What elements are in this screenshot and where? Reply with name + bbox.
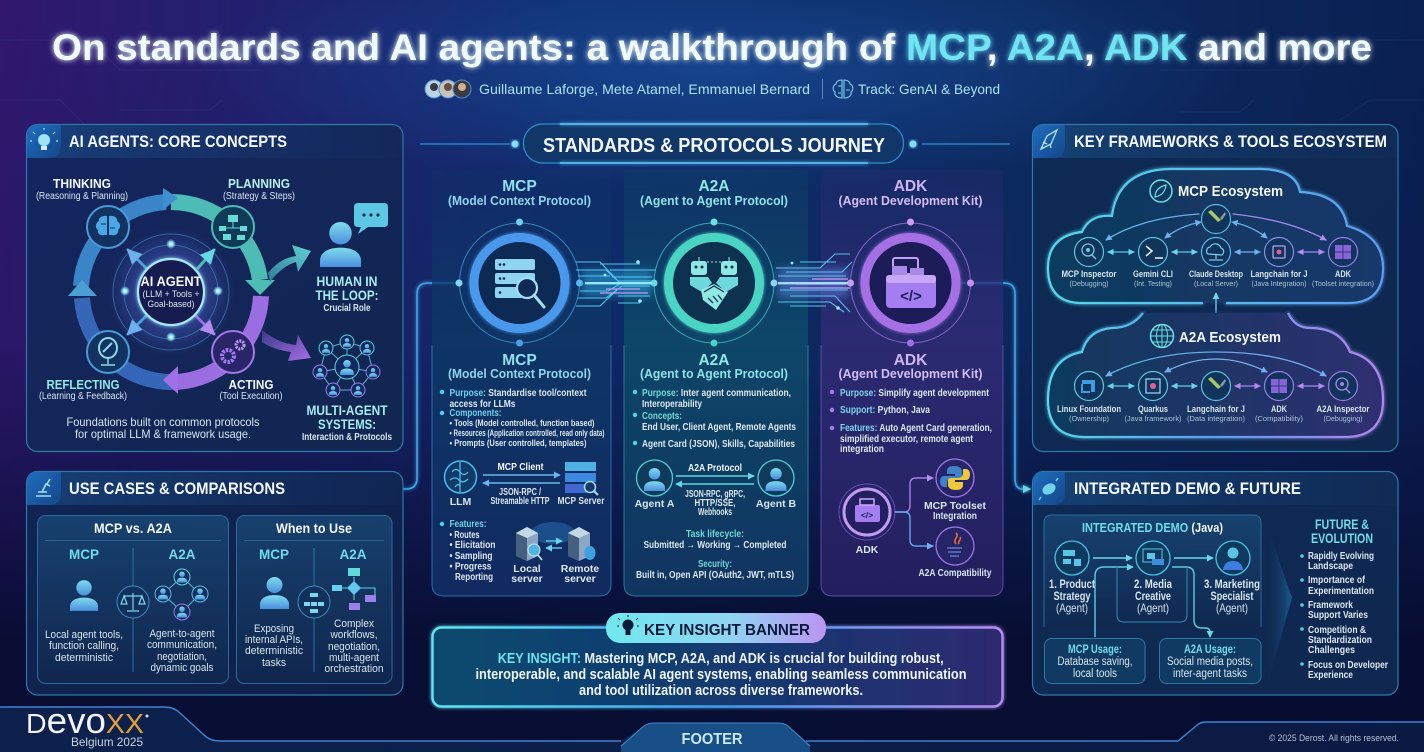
A2A details: End User, Client Agent, Remote Agents [642, 421, 796, 433]
MCP client-server diagram: MCP Client [498, 461, 544, 473]
future and evolution list: Importance of [1308, 574, 1365, 586]
labels: MCP ecosystem: (Debugging) [1070, 279, 1109, 288]
heading: INTEGRATED DEMO & FUTURE [1074, 479, 1301, 498]
future and evolution list: Challenges [1308, 644, 1355, 656]
column: MCP: MCP [502, 178, 537, 195]
comparison: MCP vs A2A: communication, [147, 639, 217, 651]
task lifecycle and security: Task lifecycle: [686, 528, 744, 540]
comparison: MCP vs A2A: Local agent tools, [45, 629, 123, 641]
cycle ring arrows [68, 188, 275, 394]
labels: A2A ecosystem: (Data integration) [1187, 414, 1245, 423]
foundations note [66, 415, 260, 441]
icon: workflow [332, 568, 376, 610]
A2A protocol diagram: JSON-RPC, gRPC, [685, 488, 745, 500]
labels: agents: 1. Product [1049, 577, 1095, 591]
comparison: MCP vs A2A: MCP [69, 547, 99, 562]
integrated demo flow [1044, 515, 1261, 684]
column: ADK: ADK [894, 178, 928, 195]
labels: agents: 2. Media [1134, 577, 1172, 591]
MCP client-server diagram [444, 461, 604, 508]
ADK integrations diagram: MCP Toolset [924, 500, 986, 512]
stage labels: THINKING [53, 177, 111, 191]
icon: brain [833, 80, 853, 98]
column: ADK [821, 170, 1003, 596]
local and remote servers [511, 522, 599, 585]
task lifecycle and security [636, 528, 794, 581]
AI agent core [138, 259, 204, 325]
comparison: MCP vs A2A: negotiation, [157, 651, 207, 663]
MCP client-server diagram: LLM [450, 496, 472, 508]
MCP details: • Resources (Application controlled, read only data) [450, 428, 604, 438]
heading: USE CASES & COMPARISONS [69, 479, 285, 498]
comparison: MCP vs A2A: function calling, [49, 640, 119, 652]
comparison: when to use [236, 516, 392, 684]
key insight label pill [606, 613, 826, 643]
connector lines from journey to side panels [403, 283, 1030, 489]
icon: planning flow [212, 206, 254, 248]
future and evolution list: Rapidly Evolving [1308, 550, 1374, 562]
icon: integration [1033, 472, 1065, 505]
multi-agent systems: MULTI-AGENT [306, 403, 388, 418]
arrow to multi-agent systems [262, 330, 311, 361]
icon: LLM brain [444, 461, 476, 493]
insight text: interoperable, and scalable AI agent systems, enabling seamless communication [476, 666, 966, 683]
arrow between ecosystems [1215, 293, 1217, 323]
MCP details: access for LLMs [450, 398, 516, 410]
labels: agents: (Agent) [1056, 601, 1088, 615]
future and evolution list: Competition & [1308, 624, 1366, 636]
MCP ecosystem cloud: MCP Ecosystem [1178, 183, 1283, 200]
icon: toolbox with code: </> [900, 288, 922, 305]
ADK details: Features: Auto Agent Card generation, [840, 422, 992, 434]
stage labels: (Tool Execution) [220, 391, 282, 402]
future and evolution list: Support Varies [1308, 609, 1368, 621]
labels: A2A ecosystem: Quarkus [1138, 404, 1168, 415]
A2A protocol diagram: Agent A [635, 498, 675, 510]
labels: A2A ecosystem: (Ownership) [1069, 414, 1109, 423]
MCP client-server diagram: MCP Server [558, 495, 604, 507]
MCP features list: • Progress [450, 561, 492, 573]
labels: A2A ecosystem: A2A Inspector [1316, 404, 1370, 415]
labels: agents: Specialist [1210, 589, 1254, 603]
multi-agent systems: Interaction & Protocols [302, 432, 392, 443]
labels: agents: (Agent) [1216, 601, 1248, 615]
future and evolution list: Focus on Developer [1308, 659, 1388, 671]
labels: A2A ecosystem: Linux Foundation [1057, 404, 1121, 415]
A2A protocol diagram [635, 460, 797, 518]
A2A details: Concepts: [642, 410, 682, 422]
comparison: MCP vs A2A: Agent-to-agent [150, 628, 214, 640]
labels: MCP ecosystem: Gemini CLI [1133, 269, 1173, 280]
MCP usage box: Database saving, [1058, 656, 1132, 668]
speakers and track line [425, 79, 1000, 99]
Devoxx logo: Belgium 2025 [71, 735, 143, 749]
ADK details: Purpose: Simplify agent development [840, 387, 989, 399]
local and remote servers: Local [513, 563, 541, 575]
stage labels [36, 177, 295, 402]
icon: acting gears [212, 331, 254, 373]
stage labels: (Reasoning & Planning) [36, 191, 128, 202]
labels: A2A ecosystem: ADK [1271, 404, 1287, 415]
insight text [476, 650, 966, 699]
icon: agent network [155, 569, 208, 620]
panel: use cases and comparisons [26, 472, 403, 695]
A2A details: Agent Card (JSON), Skills, Capabilities [642, 438, 795, 450]
ADK integrations diagram: </> [861, 510, 873, 520]
human in the loop: THE LOOP: [316, 288, 378, 303]
comparison: when to use: MCP [259, 547, 289, 562]
A2A ecosystem cloud: A2A Ecosystem [1179, 329, 1281, 346]
column: ADK: (Agent Development Kit) [838, 194, 982, 208]
ADK details [830, 387, 992, 455]
labels: agents: (Agent) [1137, 601, 1169, 615]
comparison: MCP vs A2A: MCP vs. A2A [94, 520, 172, 536]
MCP details: Components: [450, 407, 502, 419]
icons: agents [1055, 541, 1250, 575]
comparison: when to use: internal APIs, [245, 634, 303, 646]
column: MCP: (Model Context Protocol) [448, 367, 591, 381]
MCP usage box: MCP Usage: [1068, 642, 1122, 656]
stage labels: PLANNING [228, 177, 290, 191]
comparison: MCP vs A2A: deterministic [55, 652, 113, 664]
icon: python [940, 466, 970, 490]
foundations note: Foundations built on common protocols [66, 415, 260, 429]
data streams between protocols [576, 254, 852, 312]
heading: AI AGENTS: CORE CONCEPTS [69, 132, 287, 151]
icon: hierarchy [298, 586, 330, 618]
A2A protocol diagram: A2A Protocol [688, 462, 742, 474]
A2A details [633, 387, 796, 450]
MCP client-server diagram: JSON-RPC / [499, 486, 541, 498]
stage labels: ACTING [228, 378, 274, 392]
MCP details [440, 387, 604, 526]
comparison: when to use: Exposing [254, 623, 294, 635]
MCP usage box: local tools [1073, 668, 1117, 680]
icon: robots handshake [650, 218, 778, 346]
labels: agents [1049, 577, 1260, 615]
icons: tools in MCP ecosystem [1082, 210, 1351, 260]
icon: server with magnifier [456, 218, 583, 346]
labels: MCP ecosystem: Claude Desktop [1189, 269, 1243, 280]
ADK integrations diagram: A2A Compatibility [918, 567, 992, 579]
human in the loop: HUMAN IN [316, 274, 378, 289]
comparison: MCP vs A2A: dynamic goals [150, 662, 214, 674]
icon: bulb [617, 615, 639, 635]
labels: A2A ecosystem: (Compatibility) [1255, 414, 1303, 423]
comparison: MCP vs A2A [38, 516, 228, 684]
icon: MCP server [565, 462, 598, 495]
stage labels: (Learning & Feedback) [39, 391, 127, 402]
footer label: FOOTER [682, 731, 743, 748]
speaker avatars [425, 80, 471, 98]
comparison: when to use: multi-agent [329, 652, 379, 664]
MCP details: • Prompts (User controlled, templates) [450, 438, 586, 449]
A2A protocol diagram: HTTP/SSE, [694, 497, 736, 509]
future and evolution list: FUTURE & [1315, 517, 1369, 532]
ADK details: simplified executor, remote agent [840, 433, 973, 445]
panel: AI agents core concepts [26, 124, 403, 452]
MCP features list: • Routes [450, 529, 480, 541]
ADK integrations diagram: ADK [856, 544, 879, 556]
A2A usage box: A2A Usage: [1184, 642, 1236, 656]
A2A protocol diagram: Webhooks [698, 506, 732, 518]
A2A details: Interoperability [642, 398, 702, 410]
icons: tools in A2A ecosystem [1082, 377, 1350, 393]
track: Track: GenAI & Beyond [858, 81, 1000, 97]
MCP details: Purpose: Standardise tool/context [450, 387, 587, 399]
AI agent core: (LLM + Tools + [142, 289, 200, 300]
A2A ecosystem cloud [1048, 313, 1383, 437]
icon: reflecting mirror [87, 331, 129, 373]
copyright: © 2025 Derost. All rights reserved. [1269, 733, 1399, 743]
labels: agents: Creative [1135, 589, 1171, 603]
agent cycle [36, 177, 295, 402]
icon: scales [117, 586, 149, 618]
A2A details: Purpose: Inter agent communication, [642, 387, 791, 399]
MCP features list: Features: [450, 518, 486, 530]
comparison: when to use: deterministic [245, 645, 303, 657]
task lifecycle and security: Built in, Open API (OAuth2, JWT, mTLS) [636, 569, 794, 581]
AI agent core: Goal-based) [148, 299, 194, 310]
journey heading pill: STANDARDS & PROTOCOLS JOURNEY [543, 135, 886, 157]
panel: integrated demo and future [1032, 472, 1398, 695]
icon: java [947, 533, 962, 556]
future and evolution list: EVOLUTION [1311, 531, 1373, 546]
labels: A2A ecosystem: (Debugging) [1324, 414, 1363, 423]
future and evolution list: Framework [1308, 599, 1353, 611]
labels: MCP ecosystem: (Toolset integration) [1312, 279, 1374, 288]
human in the loop [316, 203, 388, 314]
icon: rocket [1033, 125, 1065, 158]
future and evolution list: Experience [1308, 669, 1353, 681]
A2A usage box: Social media posts, [1167, 656, 1253, 668]
future and evolution list: Landscape [1308, 560, 1353, 572]
local and remote servers: server [511, 573, 543, 585]
column: MCP: (Model Context Protocol) [448, 194, 591, 208]
heading: KEY FRAMEWORKS & TOOLS ECOSYSTEM [1074, 132, 1387, 151]
comparison: when to use: When to Use [276, 520, 352, 536]
comparison: when to use: Complex [334, 618, 374, 630]
comparison: when to use: tasks [262, 657, 286, 669]
column: A2A [624, 170, 808, 596]
MCP features list: • Sampling [450, 550, 492, 562]
multi-agent systems: SYSTEMS: [318, 417, 376, 432]
labels: A2A ecosystem: Langchain for J [1187, 404, 1245, 415]
icon: toolbox with code [847, 218, 974, 346]
panel: key frameworks and tools ecosystem [1032, 124, 1398, 452]
task lifecycle and security: Submitted → Working → Completed [644, 539, 786, 551]
comparison: when to use: workflows, [330, 629, 378, 641]
column: MCP: MCP [502, 352, 537, 369]
AI agent core: AI AGENT [140, 274, 202, 289]
MCP features list: Reporting [455, 571, 493, 583]
icon: use cases [27, 472, 61, 505]
multi-agent systems [302, 335, 392, 443]
local and remote servers: server [564, 573, 596, 585]
Devoxx logo: DevoXX [26, 700, 144, 741]
column: A2A: (Agent to Agent Protocol) [640, 194, 788, 208]
journey heading pill [420, 124, 1010, 163]
icon: light bulb [27, 125, 61, 158]
labels: agents: 3. Marketing [1204, 577, 1260, 591]
labels: MCP ecosystem: MCP Inspector [1062, 269, 1117, 280]
icon: thinking brain [87, 206, 129, 248]
labels: A2A ecosystem [1057, 404, 1370, 423]
arrow to human in the loop [268, 245, 311, 282]
comparison: MCP vs A2A: A2A [168, 547, 196, 562]
future and evolution list [1300, 517, 1388, 681]
stage labels: REFLECTING [46, 378, 120, 392]
key insight label pill: KEY INSIGHT BANNER [644, 622, 810, 639]
future and evolution list: Standardization [1308, 634, 1372, 646]
center spokes [128, 250, 214, 334]
MCP features list: • Elicitation [450, 539, 496, 551]
speakers: Guillaume Laforge, Mete Atamel, Emmanuel Bernard [479, 81, 810, 97]
future and evolution list: Experimentation [1308, 585, 1374, 597]
foundations note: for optimal LLM & framework usage. [75, 427, 251, 441]
insight text: and tool utilization across diverse frameworks. [579, 682, 863, 699]
comparison: when to use: A2A [339, 547, 367, 562]
comparison: when to use: negotiation, [328, 641, 380, 653]
MCP features list [450, 518, 496, 583]
column: ADK: (Agent Development Kit) [838, 367, 982, 381]
ADK integrations diagram: Integration [933, 510, 977, 522]
footer [0, 700, 1424, 752]
key insight banner [432, 613, 1002, 706]
title: On standards and AI agents: a walkthrough of MCP, A2A, ADK and more [52, 27, 1372, 68]
labels: MCP ecosystem [1062, 269, 1374, 288]
labels: agents: Strategy [1054, 589, 1091, 603]
labels: MCP ecosystem: (Int. Testing) [1134, 279, 1172, 288]
human in the loop: Crucial Role [324, 303, 371, 314]
column: ADK: ADK [894, 352, 928, 369]
task lifecycle and security: Security: [698, 558, 732, 570]
integrated demo flow: INTEGRATED DEMO (Java) [1082, 520, 1223, 535]
A2A usage box [1160, 638, 1261, 684]
MCP client-server diagram: Streamable HTTP [490, 495, 550, 507]
insight text: KEY INSIGHT: Mastering MCP, A2A, and ADK is crucial for building robust, [498, 650, 944, 667]
labels: A2A ecosystem: (Java framework) [1124, 414, 1182, 423]
A2A protocol diagram: Agent B [756, 498, 797, 510]
A2A usage box: inter-agent tasks [1173, 668, 1247, 680]
ADK details: integration [840, 443, 884, 455]
ADK integrations diagram [839, 459, 992, 579]
local and remote servers: Remote [561, 563, 599, 575]
column: MCP [432, 170, 611, 596]
labels: MCP ecosystem: Langchain for J [1250, 269, 1308, 280]
labels: MCP ecosystem: (Local Server) [1194, 279, 1238, 288]
column: A2A: A2A [698, 178, 730, 195]
panel: standards and protocols journey [420, 124, 1010, 706]
stage labels: (Strategy & Steps) [223, 191, 295, 202]
comparison: when to use: orchestration [324, 663, 384, 675]
MCP details: • Tools (Model controlled, function based) [450, 418, 594, 429]
ADK details: Support: Python, Java [840, 404, 930, 416]
column: A2A: A2A [698, 352, 730, 369]
MCP usage box [1044, 638, 1145, 684]
MCP ecosystem cloud [1048, 169, 1383, 303]
arrow: demo to future [1268, 528, 1292, 682]
labels: MCP ecosystem: (Java Integration) [1252, 279, 1307, 288]
column: A2A: (Agent to Agent Protocol) [640, 367, 788, 381]
labels: MCP ecosystem: ADK [1335, 269, 1351, 280]
